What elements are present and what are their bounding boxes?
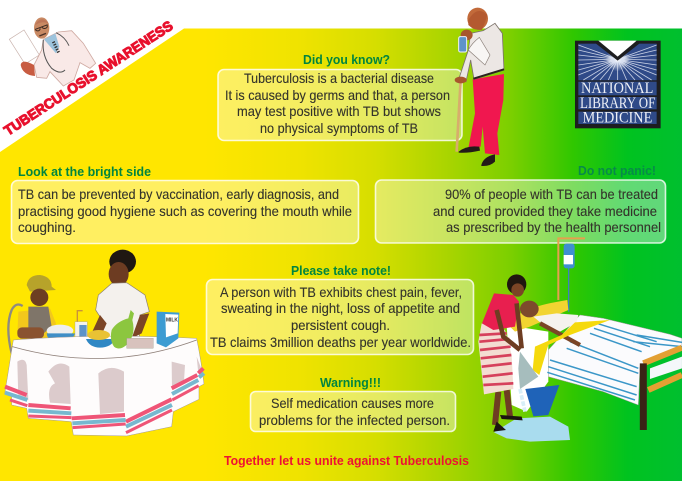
heading: look at the bright side: Look at the bright side: [18, 164, 151, 179]
panel: look at the bright side: TB can be prevented by vaccination, early diagnosis, and: [18, 186, 339, 202]
slogan: Together let us unite against Tuberculosis: [224, 453, 469, 468]
woman: [478, 274, 538, 432]
food on table: [86, 310, 153, 349]
panel: do not panic: 90% of people with TB can be treated: [445, 186, 658, 202]
panel: do not panic: as prescribed by the health personnel: [446, 219, 661, 235]
bed frame: [643, 348, 682, 430]
panel: did you know: Tuberculosis is a bacterial disease: [244, 70, 434, 86]
panel: please take note: sweating in the night, loss of appetite and: [221, 300, 460, 316]
icon: doctor: [9, 17, 96, 86]
logo: national library of medicine: MEDICINE: [583, 110, 652, 127]
panel: please take note: TB claims 3million deaths per year worldwide.: [210, 334, 471, 350]
panel: did you know: may test positive with TB but shows: [237, 103, 441, 119]
logo: national library of medicine: NATIONAL: [581, 80, 653, 97]
panel: warning: Self medication causes more: [271, 395, 434, 411]
heading: warning: Warning!!!: [320, 375, 381, 390]
panel: please take note: persistent cough.: [291, 317, 390, 333]
illustration: woman caring for bedridden patient: [478, 238, 682, 442]
panel: please take note: [206, 263, 474, 354]
title: tuberculosis awareness: TUBERCULOSIS AWARENESS: [1, 17, 176, 139]
panel: look at the bright side: practising good hygiene such as covering the mouth while: [18, 203, 352, 219]
panel: did you know: [218, 52, 462, 140]
panel: do not panic: and cured provided they take medicine: [433, 203, 657, 219]
logo: national library of medicine: LIBRARY OF: [580, 95, 656, 112]
tablecloth: [5, 336, 204, 436]
logo: national library of medicine: [575, 41, 661, 128]
panel: warning: [250, 375, 456, 432]
icon: man coughing with cane: [455, 8, 504, 166]
bucket: [525, 385, 559, 416]
panel: look at the bright side: [12, 164, 358, 244]
milk carton: [157, 312, 179, 347]
milk carton: MILK: [166, 318, 179, 324]
heading: did you know: Did you know?: [303, 52, 390, 67]
panel: please take note: A person with TB exhibits chest pain, fever,: [220, 284, 462, 300]
panel: did you know: no physical symptoms of TB: [260, 120, 418, 136]
heading: please take note: Please take note!: [291, 263, 391, 278]
panel: did you know: It is caused by germs and that, a person: [225, 87, 450, 103]
heading: do not panic: Do not panic!: [578, 163, 656, 178]
illustration: family at table: [5, 250, 204, 436]
panel: do not panic: [376, 163, 666, 243]
panel: warning: problems for the infected person.: [259, 412, 450, 428]
panel: look at the bright side: coughing.: [18, 219, 76, 235]
